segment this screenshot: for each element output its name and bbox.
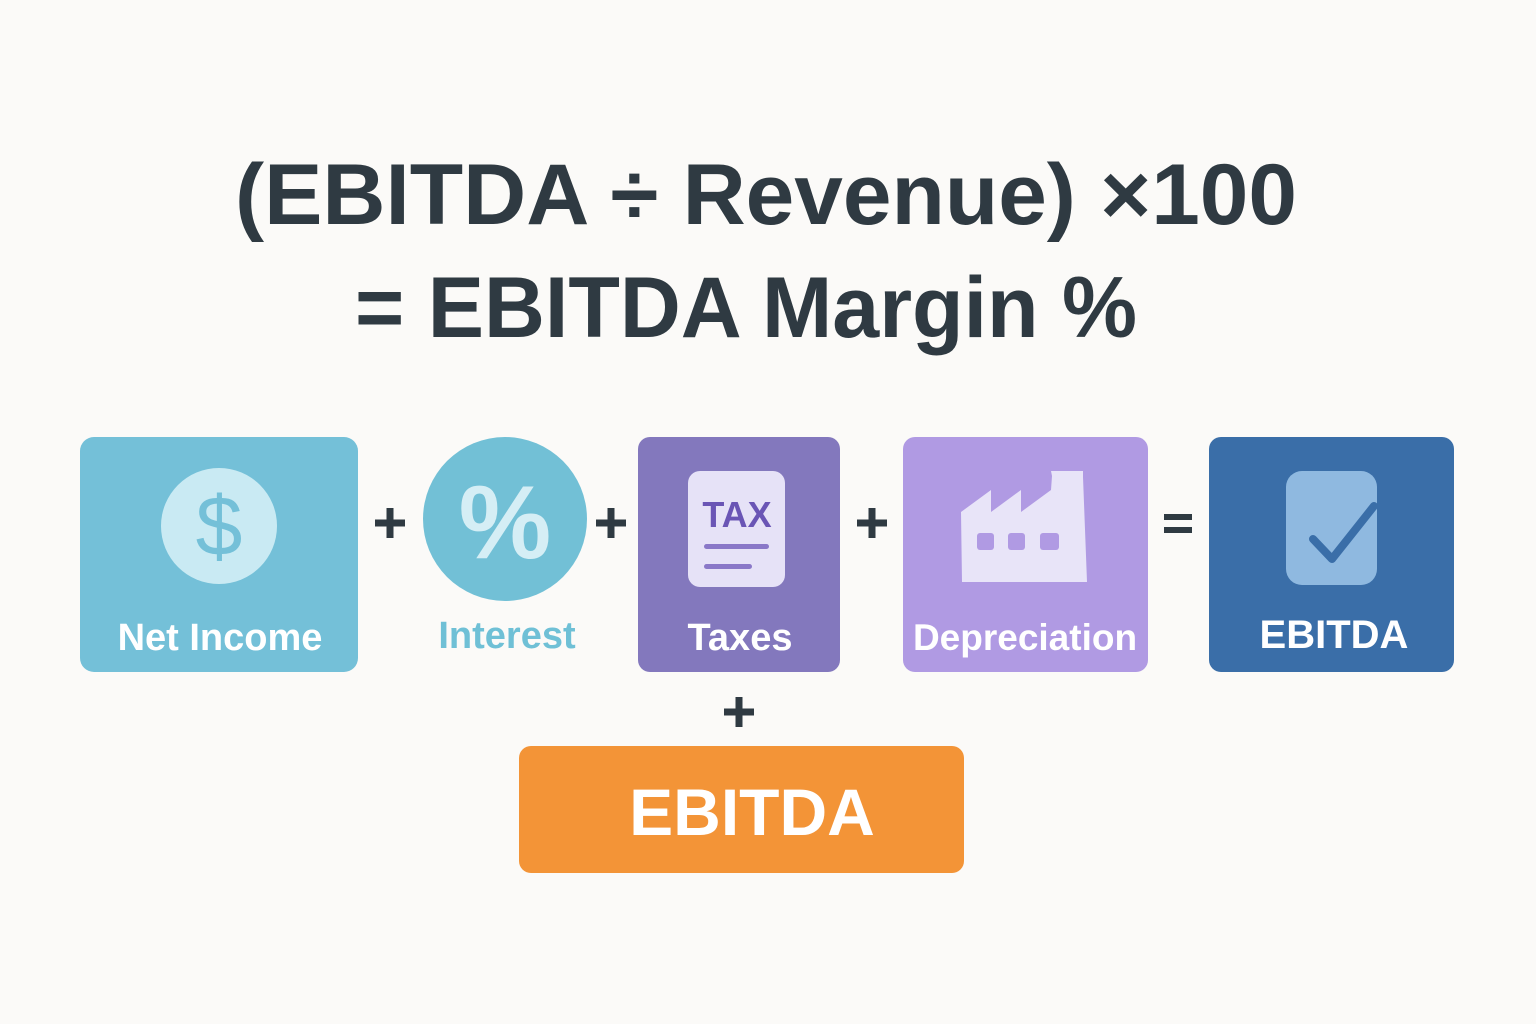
label: ebitda: EBITDA — [1260, 613, 1408, 657]
panel: ebitda result — [1209, 437, 1454, 672]
label: interest: Interest — [438, 615, 576, 657]
panel: interest — [423, 437, 587, 657]
icon: dollar coin: $ — [196, 479, 242, 573]
label: net income: Net Income — [118, 617, 322, 659]
panel: net income — [80, 437, 358, 672]
panel: depreciation — [903, 437, 1148, 672]
label: taxes: Taxes — [688, 617, 792, 659]
title: = EBITDA Margin % — [355, 260, 1137, 356]
title: (EBITDA ÷ Revenue) ×100 — [235, 147, 1297, 243]
icon: check document — [1286, 471, 1377, 585]
operator: plus 3 — [857, 508, 887, 538]
icon: tax document: TAX — [702, 494, 772, 535]
title — [235, 147, 1297, 356]
operator: plus 2 — [596, 508, 626, 538]
callout: orange ebitda — [519, 746, 964, 873]
operator: plus 4 — [724, 697, 754, 727]
panel: taxes — [638, 437, 840, 672]
icon: dollar coin — [161, 468, 277, 584]
operator: plus 1 — [375, 508, 405, 538]
icon: tax document — [688, 471, 785, 587]
callout: orange ebitda: EBITDA — [629, 775, 875, 849]
icon: percent: % — [459, 465, 551, 581]
icon: factory — [961, 471, 1087, 582]
operator: equals — [1164, 514, 1192, 533]
label: depreciation: Depreciation — [913, 617, 1137, 658]
